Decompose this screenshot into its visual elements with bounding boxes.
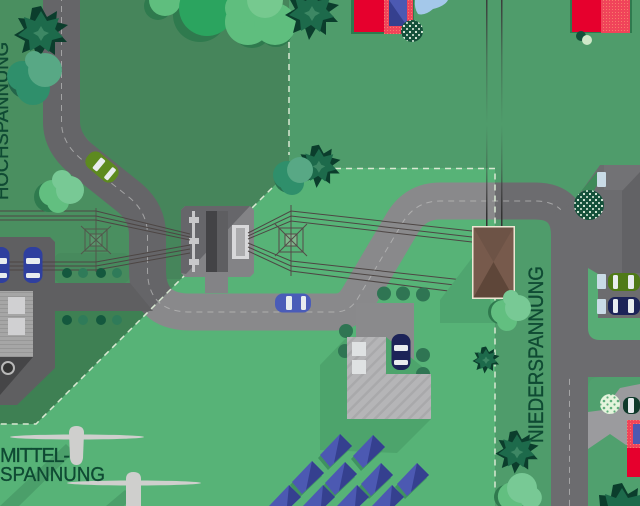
pine: bottom right (599, 483, 640, 506)
pine: small (472, 346, 500, 374)
zone: medium voltage bright green (0, 168, 495, 506)
switchgear column (189, 211, 199, 272)
red house: top left (351, 0, 414, 34)
left building (0, 291, 33, 395)
solar panels (269, 434, 429, 506)
pond (415, 0, 448, 14)
hedge circles (62, 268, 430, 381)
red house: bottom right (627, 420, 640, 477)
zone: road verge (495, 220, 551, 506)
pine: bottom centre (495, 430, 539, 474)
house shadow: brown roof (440, 258, 495, 323)
tree: near house (488, 290, 531, 331)
label: Mittelspannung: MITTEL- (0, 445, 70, 467)
red house: top right (570, 0, 632, 33)
green bed: left (55, 253, 129, 283)
zone: high voltage (0, 0, 289, 424)
tree: lower left road (34, 170, 84, 213)
cross road (551, 340, 640, 377)
dark half of pad (181, 206, 250, 274)
parking lot: left (0, 237, 153, 405)
pine: top (285, 0, 339, 40)
label: Mittelspannung: SPANNUNG (0, 464, 105, 486)
green patch: right upper (588, 268, 640, 340)
pylon: left (81, 208, 111, 272)
control house roof (236, 228, 245, 256)
zone: dark central field (80, 0, 289, 279)
parking spur (356, 303, 414, 375)
zone: dark lower-left patch (0, 305, 155, 424)
right building top band (604, 165, 640, 190)
wind turbine: 2 (67, 472, 201, 506)
wind turbine: 1 (10, 426, 144, 465)
transformer block (206, 211, 228, 272)
vertical feed lines (486, 0, 502, 226)
control house (232, 225, 249, 259)
pine: top left (14, 6, 68, 60)
substation pad (181, 206, 254, 293)
road network (62, 0, 570, 506)
charging post shadow (582, 172, 604, 198)
tree: bottom centre (494, 473, 542, 506)
L-building shadow (320, 337, 431, 453)
power lines (0, 211, 472, 294)
brown roof house (472, 226, 515, 299)
label: Niederspannung: NIEDERSPANNUNG (524, 266, 548, 443)
wind turbine shadows (0, 444, 132, 506)
tree: top left (7, 51, 62, 105)
charging stations (597, 172, 606, 314)
cars (0, 148, 640, 414)
substation (181, 206, 254, 293)
dashed boundary (0, 42, 495, 490)
L-shaped flat roof building (347, 337, 431, 419)
right side built-up area (551, 165, 640, 345)
pylon: right (275, 205, 307, 276)
green patch: right lower (588, 377, 640, 506)
tree: top cluster (144, 0, 296, 48)
right building shadow (622, 172, 640, 345)
driveway: right lower (588, 384, 640, 449)
bushes: dotted (401, 20, 620, 414)
tree: centre (273, 145, 340, 195)
transformer dark side (206, 211, 217, 272)
parking strips (598, 273, 640, 318)
